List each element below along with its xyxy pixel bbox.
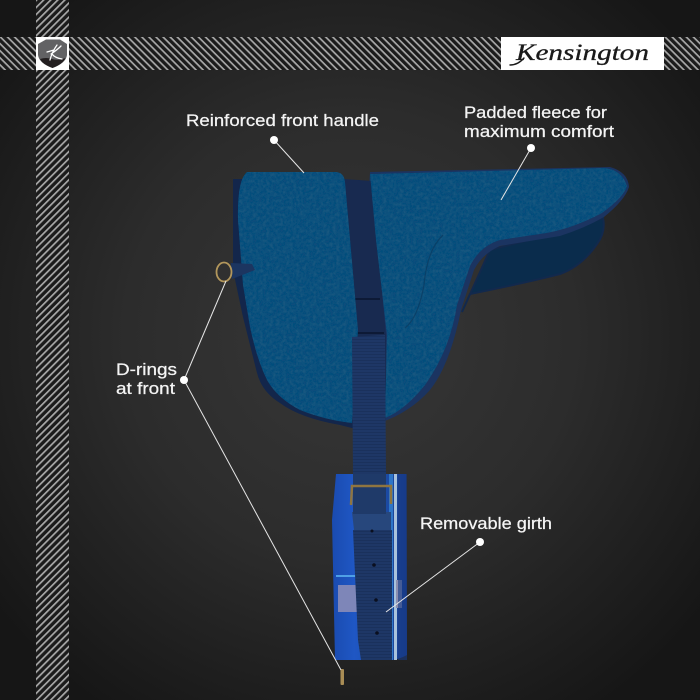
far-side navy binding xyxy=(362,167,629,427)
icon: brass buckle xyxy=(351,486,391,505)
strap holes xyxy=(370,530,379,635)
callout: reinforced front handle xyxy=(186,112,379,173)
Kensington wordmark xyxy=(501,37,664,70)
far fleece panel xyxy=(370,168,627,418)
bareback pad product xyxy=(216,167,629,685)
centre strap xyxy=(343,179,386,420)
striped horizontal band xyxy=(0,37,700,70)
callout: d-rings at front: D-rings xyxy=(116,361,177,379)
Kensington wordmark: Kensington xyxy=(515,40,649,65)
callout: removable girth xyxy=(386,515,552,612)
icon: brass d-ring xyxy=(216,262,232,282)
callout: d-rings at front xyxy=(116,281,341,670)
fleece quilting seam xyxy=(405,235,443,328)
girth webbing strap xyxy=(353,530,392,660)
callout: padded fleece: maximum comfort xyxy=(464,123,614,141)
striped vertical band xyxy=(36,0,69,700)
callout: removable girth: Removable girth xyxy=(420,515,552,533)
near fleece panel xyxy=(238,172,358,423)
lower girth strap xyxy=(352,335,386,475)
near-side navy backing xyxy=(233,179,360,430)
strap stitching box xyxy=(355,299,384,333)
callout: d-rings at front: at front xyxy=(116,380,175,398)
brass strap tip xyxy=(340,669,344,685)
strap upper xyxy=(353,474,386,514)
callout: reinforced front handle: Reinforced front handle xyxy=(186,112,379,130)
underside of far panel xyxy=(462,218,604,312)
d-ring tab xyxy=(231,263,255,279)
strap keeper xyxy=(352,512,391,530)
plaid girth xyxy=(332,474,407,660)
callout: padded fleece: Padded fleece for xyxy=(464,104,608,122)
callout: padded fleece xyxy=(464,104,614,200)
icon: K shield logo xyxy=(36,37,69,70)
